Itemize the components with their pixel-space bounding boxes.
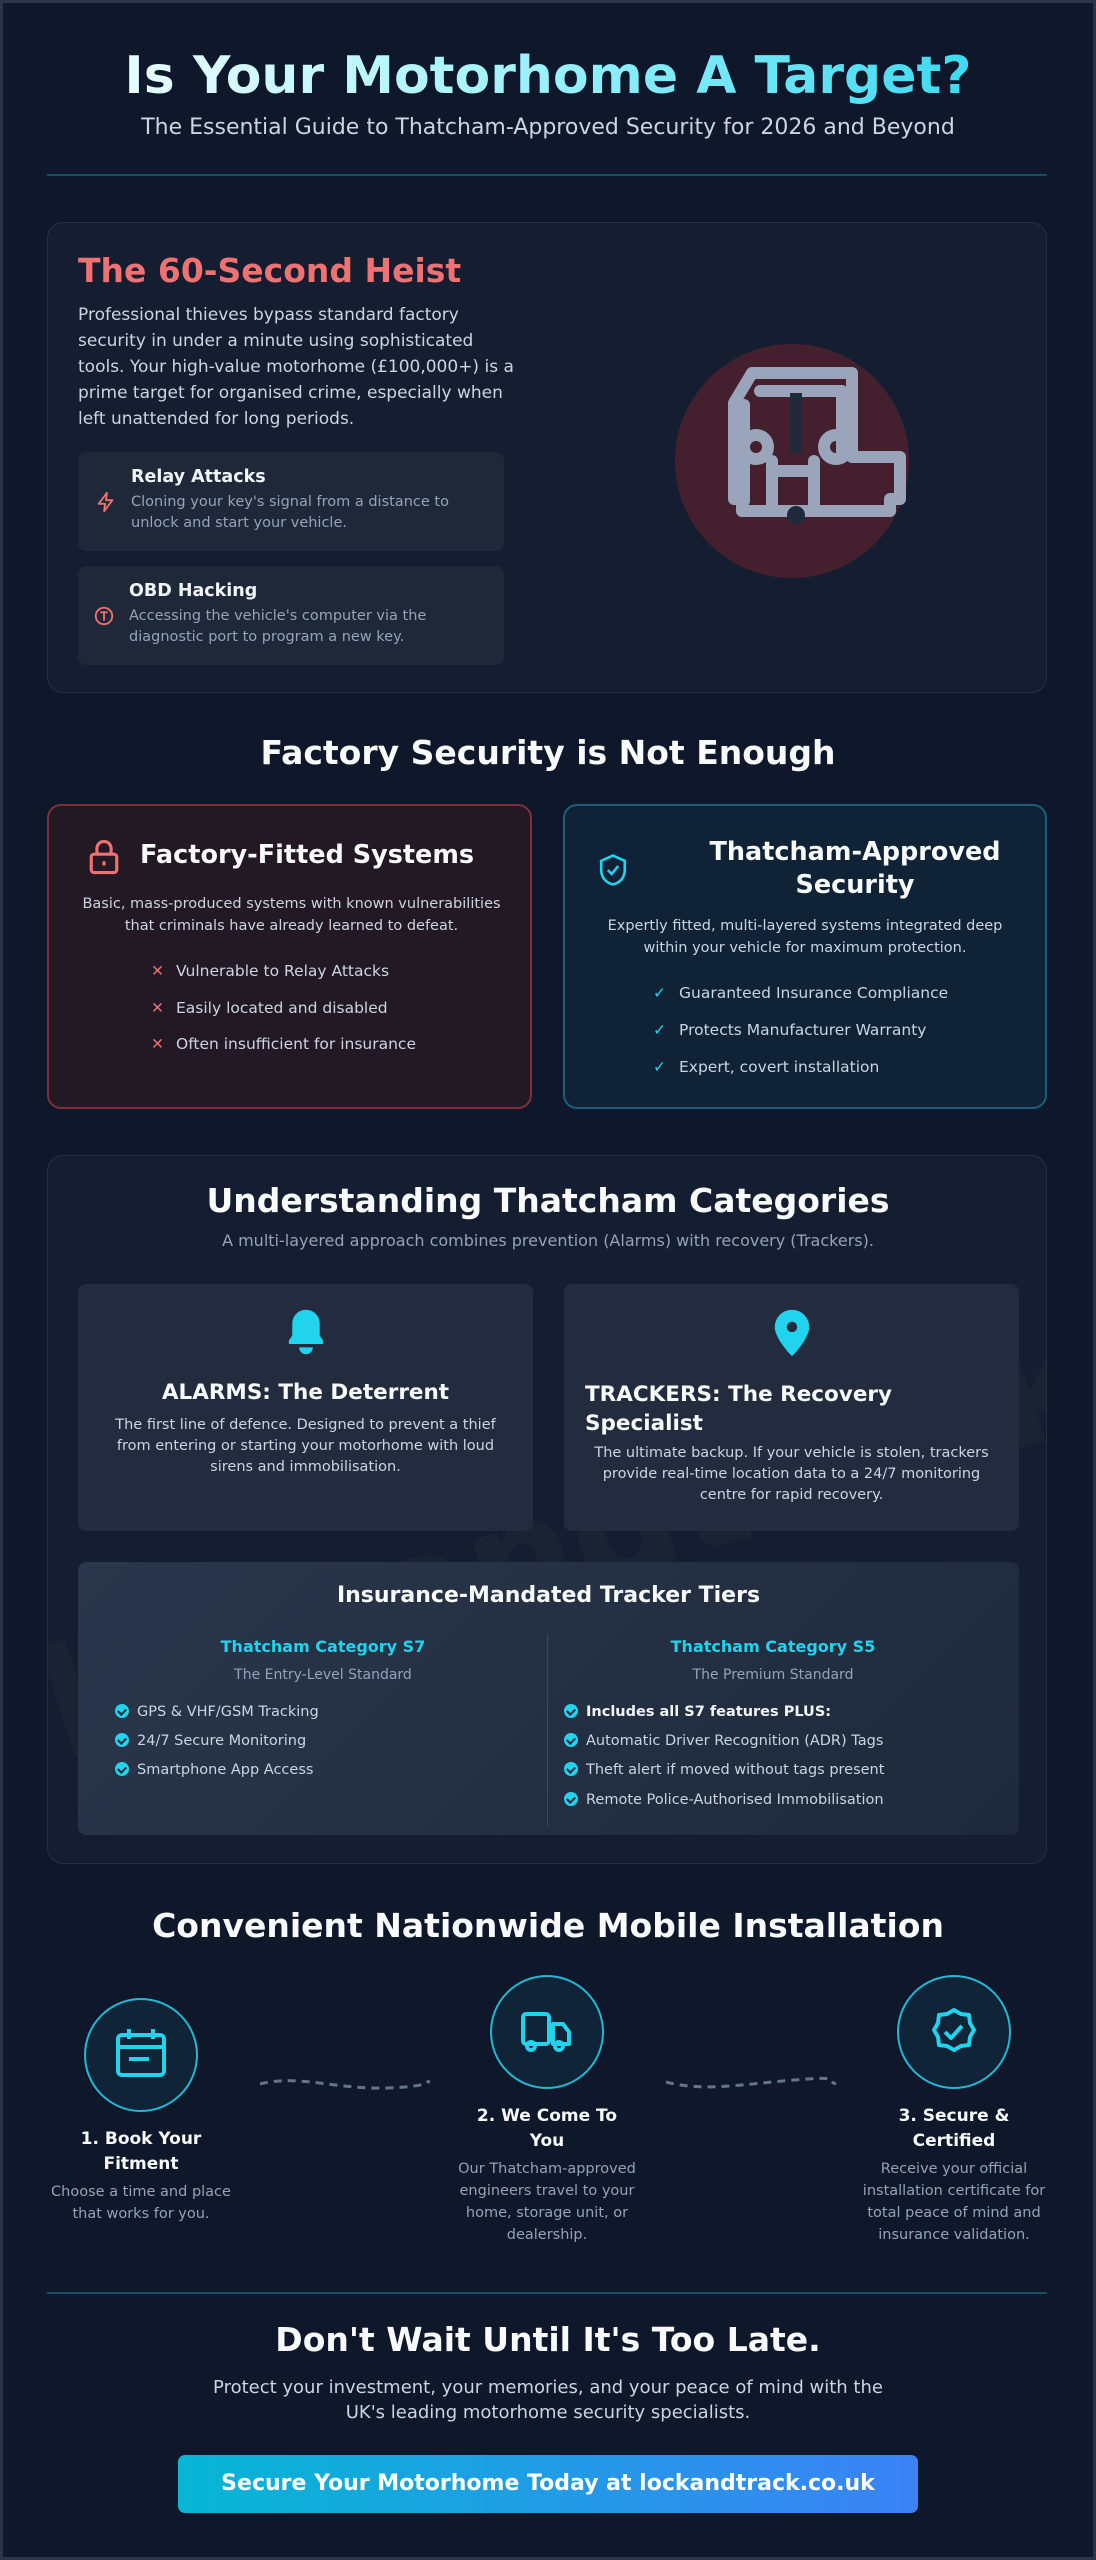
column: S5: Includes all S7 features PLUS: (586, 1704, 831, 1720)
icon: badge (897, 1975, 1011, 2089)
text: cta: Protect your investment, your memories, and your peace of mind with the UK's leading motorhome security specialists. (213, 2377, 883, 2423)
icon: lightning (98, 492, 114, 512)
box: relay attacks: Cloning your key's signal from a distance to unlock and start your vehicle. (131, 494, 449, 531)
box: OBD hacking: Accessing the vehicle's computer via the diagnostic port to program a new key. (129, 608, 426, 645)
column: S7: GPS & VHF/GSM Tracking (137, 1704, 319, 1720)
icon: motorhome in red circle (675, 344, 909, 578)
box: relay attacks (78, 452, 504, 551)
card: trackers (564, 1284, 1019, 1531)
step 1: book (51, 1998, 231, 2222)
heading: Thatcham-Approved Security (709, 837, 1001, 900)
icon: calendar (84, 1998, 198, 2112)
icon: lock (90, 840, 118, 874)
text: Basic, mass-produced systems with known vulnerabilities that criminals have already learned to defeat. (82, 896, 501, 934)
box: OBD hacking (78, 566, 504, 665)
heading: mobile installation: Convenient Nationwide Mobile Installation (152, 1906, 944, 1945)
panel: thatcham-approved: ✓ Guaranteed Insurance Compliance (653, 984, 948, 1002)
column: S5 (564, 1637, 884, 1808)
box: relay attacks: Relay Attacks (131, 467, 266, 487)
arrow: dashed connector 2 (666, 2076, 836, 2088)
card: trackers: TRACKERS: The Recovery Specialist (585, 1382, 892, 1436)
step 3: secure & certified (863, 1975, 1046, 2243)
panel: factory-fitted: ✕ Easily located and disabled (151, 999, 388, 1017)
column: S7 (115, 1637, 425, 1778)
panel: factory-fitted (47, 804, 532, 1109)
text: Expertly fitted, multi-layered systems integrated deep within your vehicle for maximum protection. (608, 918, 1002, 956)
box: OBD hacking: OBD Hacking (129, 581, 257, 601)
step 2: we come to you: Our Thatcham-approved engineers travel to your home, storage unit, or dealership. (458, 2161, 636, 2243)
heading: heist: The 60-Second Heist (78, 251, 461, 290)
column: S7: The Entry-Level Standard (234, 1667, 412, 1683)
panel: factory-fitted: ✕ Vulnerable to Relay Attacks (151, 962, 389, 980)
column: S7: 24/7 Secure Monitoring (137, 1733, 306, 1749)
step 3: secure & certified: Receive your official installation certificate for total peace of mind and insurance validation. (863, 2161, 1045, 2243)
text: heist intro: Professional thieves bypass standard factory security in under a minute using sophisticated tools. Your high-value motorhome (£100,000+) is a prime target for organised crime, especially when left unattended for long periods. (78, 305, 514, 429)
button: cta (178, 2455, 918, 2513)
column: S5: Remote Police-Authorised Immobilisation (586, 1792, 884, 1808)
card: alarms: ALARMS: The Deterrent (162, 1380, 449, 1405)
panel: thatcham-approved (563, 804, 1047, 1109)
step 3: secure & certified: 3. Secure & Certified (899, 2106, 1009, 2151)
subtitle: A multi-layered approach combines prevention (Alarms) with recovery (Trackers). (222, 1231, 874, 1250)
column: S5: Automatic Driver Recognition (ADR) Tags (586, 1733, 883, 1749)
icon: port (94, 606, 114, 626)
heading: Understanding Thatcham Categories (206, 1181, 890, 1220)
column: S7: Thatcham Category S7 (221, 1637, 425, 1656)
panel: thatcham-approved: ✓ Protects Manufacturer Warranty (653, 1021, 926, 1039)
step 2: we come to you (458, 1975, 636, 2243)
heading: call to action: Don't Wait Until It's Too Late. (275, 2320, 821, 2359)
panel: 60-second heist (47, 222, 1047, 693)
step 1: book: Choose a time and place that works for you. (51, 2184, 231, 2222)
column: S5: Thatcham Category S5 (671, 1637, 875, 1656)
card: trackers: The ultimate backup. If your vehicle is stolen, trackers provide real-time location data to a 24/7 monitoring centre for rapid recovery. (594, 1445, 989, 1503)
panel: thatcham-approved: ✓ Expert, covert installation (653, 1058, 879, 1076)
step 2: we come to you: 2. We Come To You (477, 2106, 617, 2151)
subtitle: The Essential Guide to Thatcham-Approved Security for 2026 and Beyond (141, 115, 955, 140)
box: tracker tiers: Insurance-Mandated Tracker Tiers (337, 1583, 760, 1608)
column: S5: Theft alert if moved without tags present (586, 1762, 884, 1778)
step 1: book: 1. Book Your Fitment (81, 2129, 201, 2174)
column: S7: Smartphone App Access (137, 1762, 313, 1778)
heading: factory security: Factory Security is Not Enough (260, 733, 836, 772)
panel: factory-fitted: ✕ Often insufficient for insurance (151, 1035, 416, 1053)
button: cta: Secure Your Motorhome Today at lockandtrack.co.uk (221, 2471, 875, 2496)
box: tracker tiers (78, 1562, 1019, 1835)
card: alarms: The first line of defence. Designed to prevent a thief from entering or starting your motorhome with loud sirens and immobilisation. (115, 1417, 496, 1475)
heading: Factory-Fitted Systems (140, 840, 474, 870)
card: alarms (78, 1284, 533, 1531)
list: pros (653, 984, 948, 1076)
icon: pin (774, 1310, 810, 1356)
arrow: dashed connector 1 (260, 2079, 430, 2090)
icon: shield (600, 854, 626, 886)
list: cons (151, 962, 416, 1053)
icon: truck (490, 1975, 604, 2089)
column: S5: The Premium Standard (693, 1667, 853, 1683)
icon: bell (288, 1310, 324, 1354)
title: Is Your Motorhome A Target? (124, 46, 972, 106)
